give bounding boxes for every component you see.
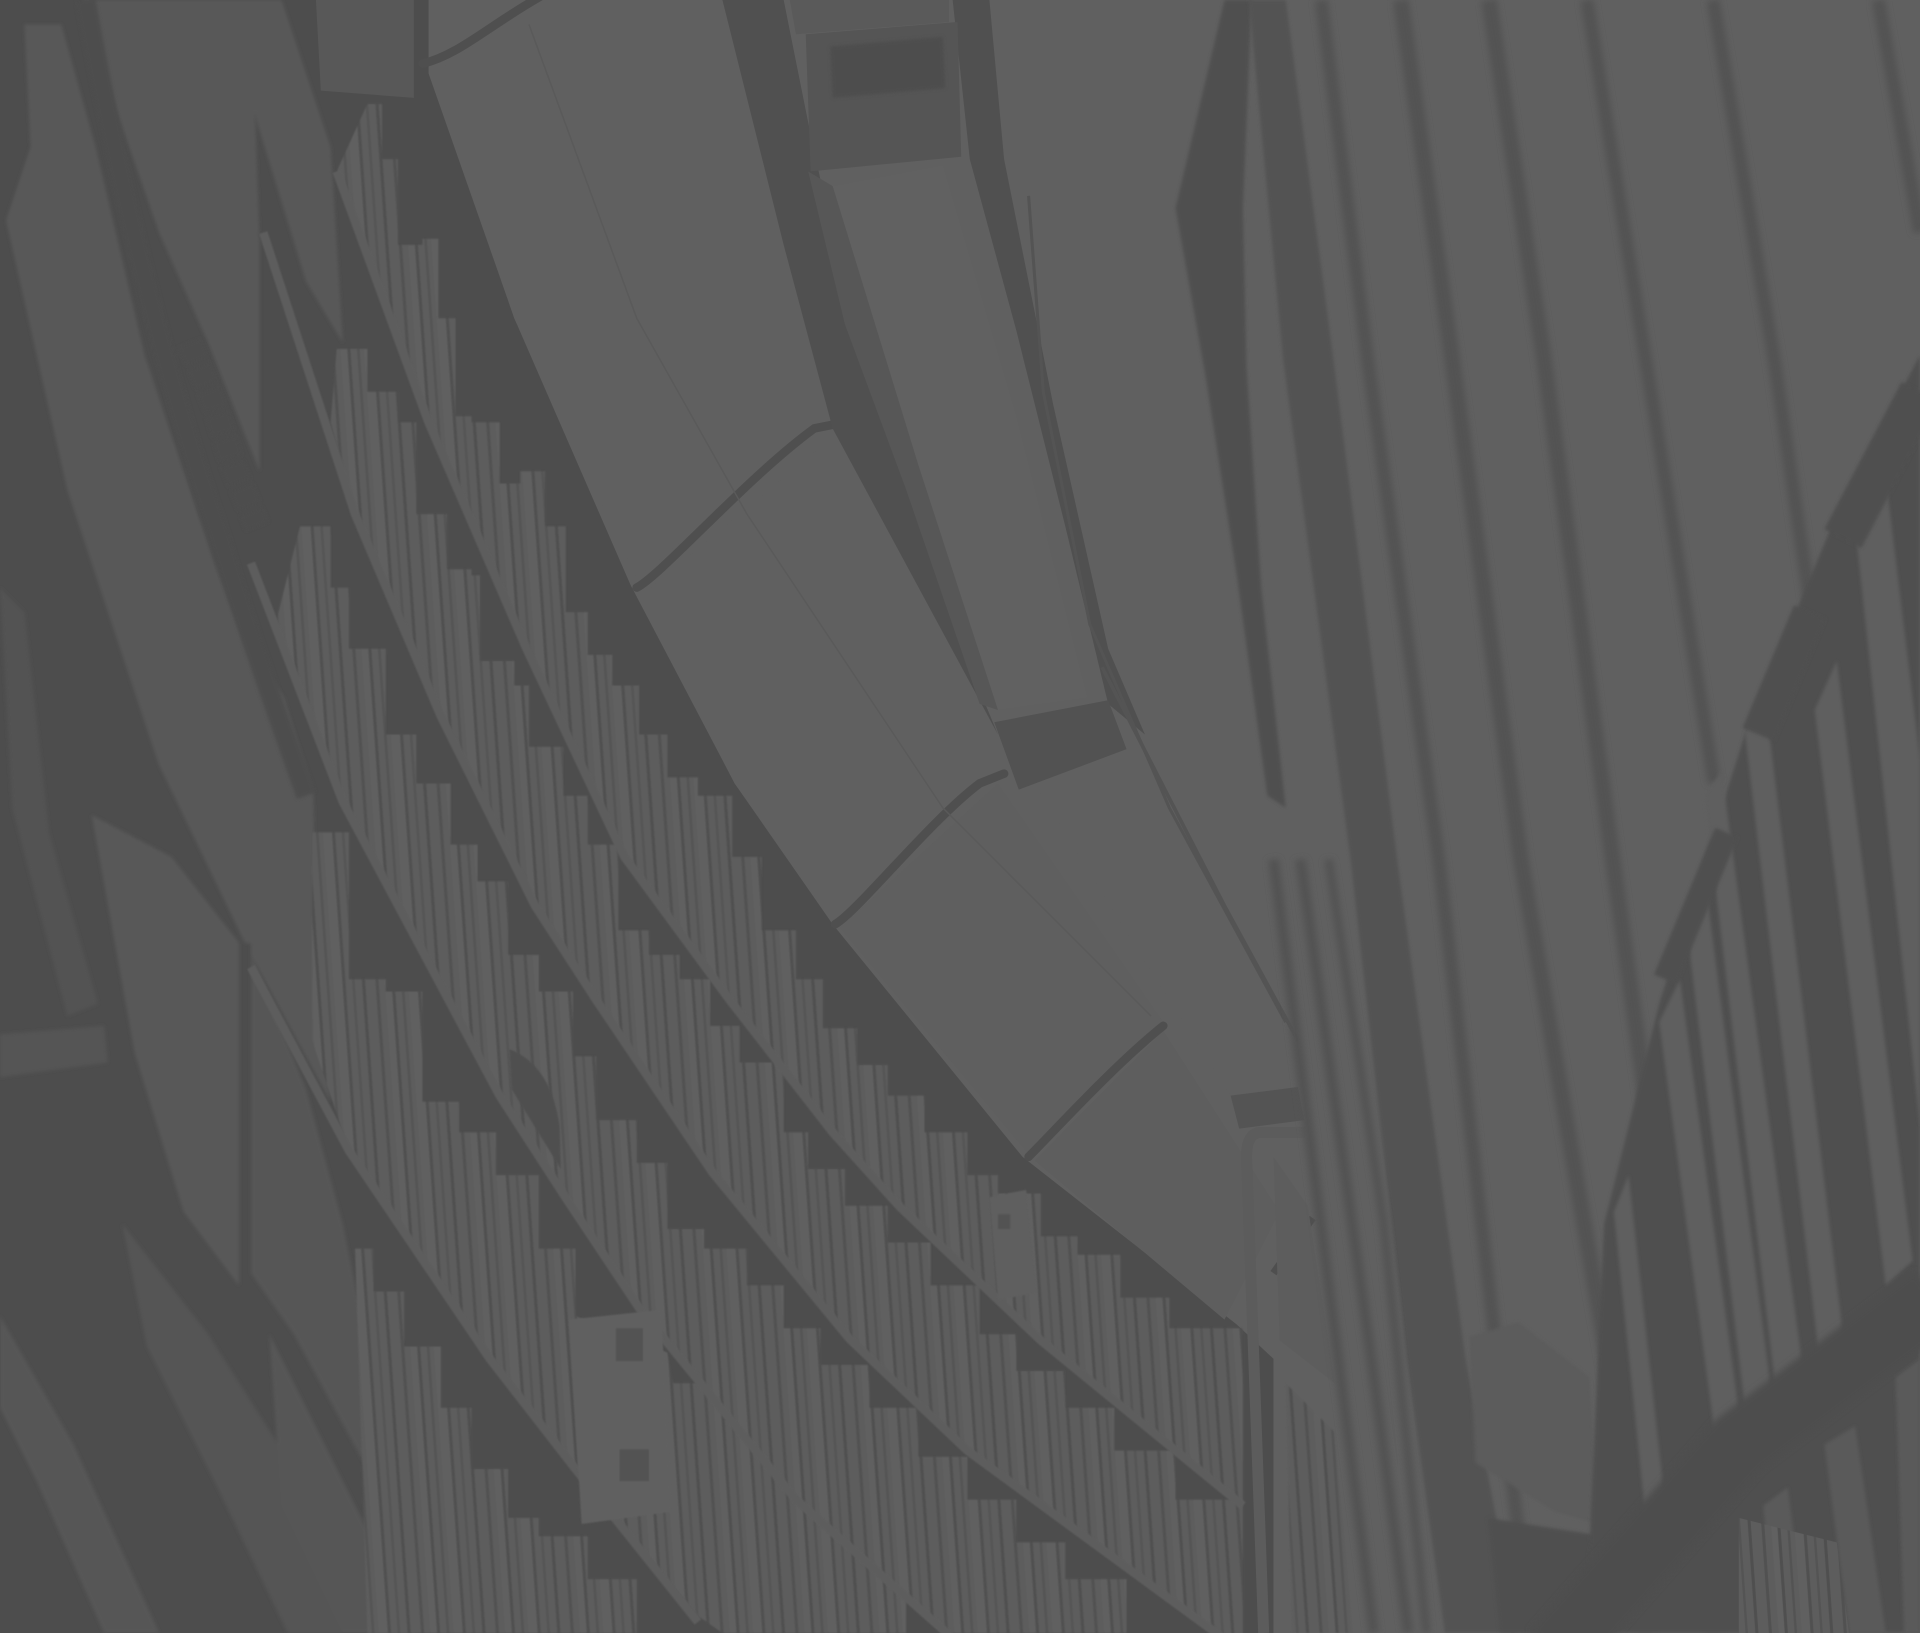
panel beside ladder <box>1273 1157 1335 1383</box>
arch band right side <box>953 0 1145 734</box>
right dark frame <box>1176 0 1286 808</box>
faint diagonal seam lines on the panels <box>529 24 1151 1016</box>
ladder rail <box>1247 1132 1305 1633</box>
skylight panel 4 <box>1035 1031 1280 1320</box>
skylight panel 2 <box>639 431 998 921</box>
dark vertical column <box>1249 0 1518 1633</box>
right dark lattice with narrow strips <box>1586 355 1920 1633</box>
top grey box on the shelving <box>316 0 414 98</box>
diagonal dark frame on right <box>1665 392 1920 979</box>
small face-out book <box>989 1190 1037 1300</box>
book with photos <box>569 1310 671 1524</box>
book row C <box>276 526 1127 1633</box>
dark centre of window block <box>830 37 945 98</box>
book row right of ladder <box>1286 1383 1353 1633</box>
lower right books <box>1739 1518 1849 1633</box>
skylight upper window <box>790 0 949 34</box>
lower junction <box>1231 1087 1304 1129</box>
book row lower centre <box>1496 1530 1592 1633</box>
dark shelving mass <box>0 0 1273 1633</box>
skylight panel 1 <box>431 0 839 578</box>
book row A <box>337 104 1243 1506</box>
book row E <box>355 1249 637 1633</box>
skylight panel 3 <box>840 783 1163 1154</box>
arch frame left edge <box>808 171 998 710</box>
thin arch lines <box>1029 196 1298 1041</box>
vertical window bars <box>1273 0 1920 1633</box>
skylight glass pane <box>833 165 1087 710</box>
ladder rail shadow <box>1273 1218 1313 1273</box>
book row B <box>331 349 1243 1633</box>
blurred diagonal rail bottom right <box>1555 1298 1920 1633</box>
dark junction block <box>994 700 1127 790</box>
dark rounded book <box>509 1049 561 1169</box>
shelf lines <box>251 171 1243 1633</box>
panel divider struts <box>422 0 1163 1157</box>
panel: blurred books on the far left <box>0 0 416 1633</box>
dark scalloped strip on the far left <box>86 0 306 796</box>
book row D <box>312 832 906 1633</box>
lower glass pane <box>1038 771 1288 1096</box>
window block <box>806 22 961 171</box>
panel: book rows <box>276 104 1592 1633</box>
dark arch band <box>722 0 998 734</box>
lower centre dark band <box>1488 1518 1610 1633</box>
lower centre window panel <box>1469 1322 1598 1524</box>
